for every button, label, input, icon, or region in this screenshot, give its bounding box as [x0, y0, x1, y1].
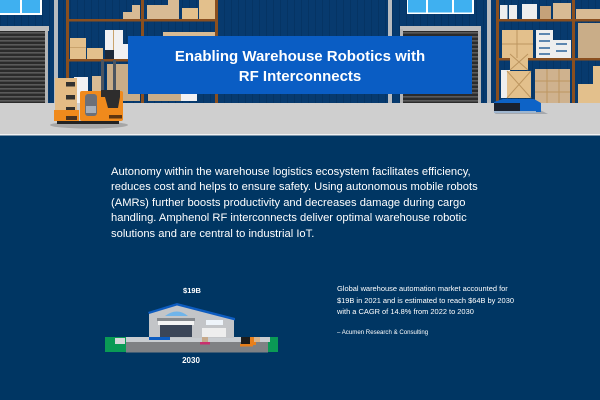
- floor: [0, 103, 600, 136]
- intro paragraph: (AMRs) further boosts productivity and decreases damage during cargo: [111, 197, 465, 209]
- warehouse illustration: [105, 303, 278, 352]
- title banner: Enabling Warehouse Robotics with: [175, 48, 425, 64]
- title banner: RF Interconnects: [239, 68, 361, 84]
- market statistic text: [337, 284, 514, 316]
- title banner: [128, 36, 472, 94]
- market statistic text: Global warehouse automation market accounted for: [337, 284, 508, 293]
- intro paragraph: solutions and are central to industrial IoT.: [111, 228, 314, 240]
- intro paragraph: handling. Amphenol RF interconnects deliver optimal warehouse robotic: [111, 212, 467, 224]
- pillars: [54, 0, 491, 103]
- intro paragraph: Autonomy within the warehouse logistics ecosystem facilitates efficiency,: [111, 166, 471, 178]
- year label: 2030: [182, 356, 200, 365]
- warehouse scene: [0, 0, 600, 136]
- intro paragraph: reduces cost and helps to ensure safety. Using autonomous mobile robots: [111, 181, 478, 193]
- market statistic text: $19B in 2021 and is estimated to reach $64B by 2030: [337, 296, 514, 304]
- intro paragraph: [111, 166, 478, 240]
- market statistic text: with a CAGR of 14.8% from 2022 to 2030: [337, 307, 474, 316]
- ground: [105, 337, 278, 352]
- right window: [407, 0, 474, 14]
- source citation: – Acumen Research & Consulting: [337, 329, 428, 336]
- mini vehicles: [115, 337, 260, 346]
- left shelving: [66, 0, 218, 103]
- left window: [0, 0, 42, 15]
- left roller door: [0, 26, 49, 103]
- right roller door: [400, 26, 481, 103]
- building: [148, 303, 235, 340]
- forklift robot: [50, 50, 128, 128]
- value label: $19B: [183, 286, 201, 295]
- blue mobile robot: [494, 99, 548, 114]
- right shelving: [496, 0, 600, 103]
